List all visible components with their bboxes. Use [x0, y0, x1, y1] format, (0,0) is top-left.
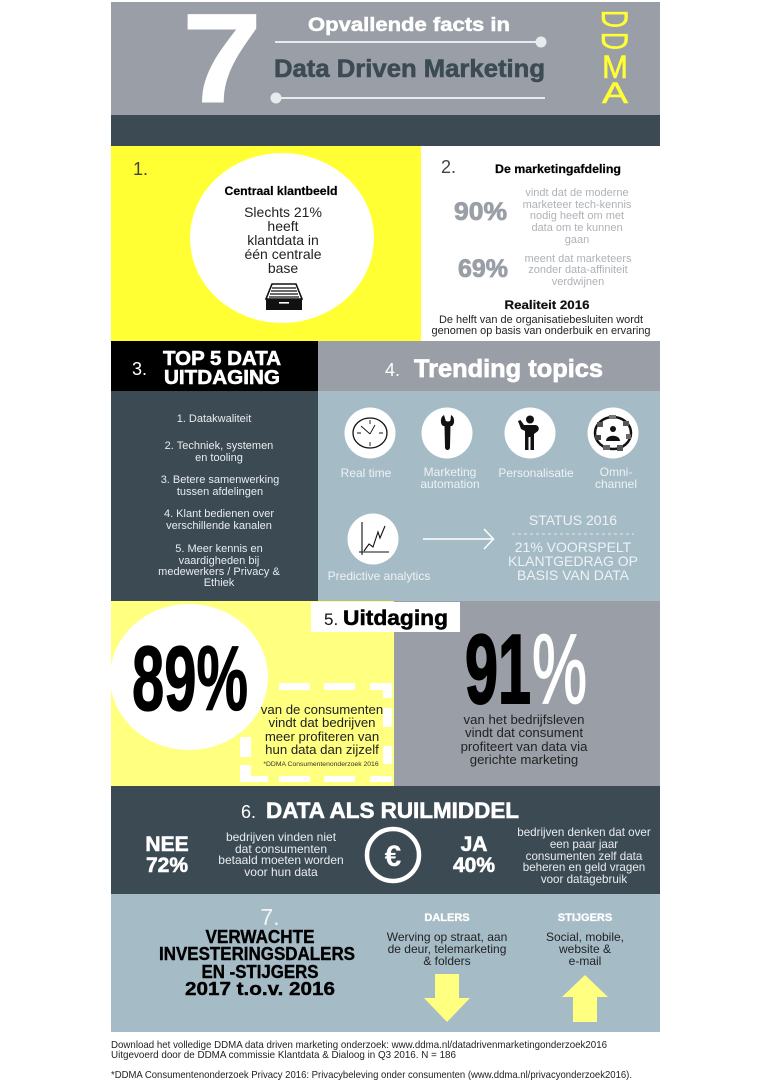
label: predictive analytics: Predictive analytics — [328, 569, 430, 583]
panel: 4 trending heading: 4. — [385, 360, 400, 380]
reality heading: Realiteit 2016 — [504, 298, 590, 312]
label: personalisatie: Personalisatie — [498, 466, 574, 480]
panel: 3 top 5 list: Ethiek — [204, 577, 235, 589]
heading: 5 Uitdaging: Uitdaging — [343, 607, 448, 630]
heading: Centraal klantbeeld — [224, 186, 338, 198]
number 1: 1. — [133, 159, 148, 179]
dalers text — [387, 930, 507, 968]
icon: archive drawer — [266, 284, 302, 310]
stat JA 40%: 40% — [453, 854, 495, 877]
text: van het bedrijfsleven — [464, 712, 584, 727]
panel: 3 top 5 heading: 3. — [132, 359, 147, 379]
panel: 5 consumers — [110, 601, 394, 786]
stat 90% text: vindt dat de moderne — [525, 187, 629, 199]
logo: DDMA: D — [594, 10, 635, 28]
footer notes: Uitgevoerd door de DDMA commissie Klantdata & Dialoog in Q3 2016. N = 186 — [111, 1050, 456, 1061]
text NEE: dat consumenten — [235, 842, 327, 856]
panel: 3 top 5 heading: TOP 5 DATA — [163, 348, 281, 370]
stat 91%: % — [532, 614, 587, 724]
panel: 3 top 5 list: 1. Datakwaliteit — [177, 413, 251, 425]
stat 90% text: nodig heeft om met — [530, 210, 624, 222]
text NEE: bedrijven vinden niet — [226, 830, 337, 844]
panel: 3 top 5 list: medewerkers / Privacy & — [158, 566, 280, 578]
title line 2: Data Driven Marketing — [274, 55, 545, 83]
icon: euro: € — [385, 840, 402, 873]
panel: 3 top 5 list: 3. Betere samenwerking — [161, 474, 279, 486]
stijgers text — [546, 930, 624, 968]
text NEE — [218, 830, 344, 879]
reality text: genomen op basis van onderbuik en ervaring — [432, 325, 650, 337]
logo: DDMA: A — [602, 77, 628, 110]
label: omni-channel — [595, 465, 637, 491]
stat 69% text: meent dat marketeers — [524, 253, 632, 265]
label: omni-channel: Omni- — [600, 465, 632, 479]
title rule bottom — [270, 92, 545, 104]
dashed frame — [240, 683, 392, 782]
heading: 2017 t.o.v. 2016 — [185, 979, 335, 999]
panel: 3 top 5 list: 2. Techniek, systemen — [165, 440, 273, 452]
icon: line chart — [348, 514, 398, 564]
reality text — [432, 314, 650, 337]
stat 90% text — [523, 187, 632, 246]
stat 91%: 91 — [465, 614, 531, 724]
text: vindt dat bedrijven — [268, 715, 376, 730]
stat JA 40% — [453, 833, 495, 877]
status text — [508, 534, 638, 583]
heading: DATA ALS RUILMIDDEL — [266, 798, 519, 823]
label: marketing automation: Marketing — [424, 465, 476, 479]
arrow — [423, 529, 494, 549]
logo: DDMA: M — [602, 49, 628, 85]
text JA: consumenten zelf data — [526, 850, 643, 863]
body text: Slechts 21% — [244, 204, 322, 220]
title line 1: Opvallende facts in — [308, 15, 510, 36]
icon: euro — [367, 829, 419, 881]
dalers text: & folders — [423, 954, 471, 968]
stijgers heading: STIJGERS — [558, 912, 612, 924]
source note: *DDMA Consumentenonderzoek 2016 — [263, 761, 379, 768]
panel: 7 investments — [111, 894, 660, 1032]
logo: DDMA: D — [594, 32, 635, 50]
panel: 4 trending heading — [318, 341, 660, 391]
label: omni-channel: channel — [595, 477, 637, 491]
text NEE: voor hun data — [244, 865, 318, 879]
heading: INVESTERINGSDALERS — [159, 944, 355, 964]
panel: 5 business — [394, 601, 660, 786]
text: meer profiteren van — [265, 729, 379, 744]
panel: 4 trending topics — [318, 391, 660, 601]
body text: base — [268, 260, 298, 276]
title rule top — [275, 36, 546, 48]
panel: 3 top 5 list: en tooling — [195, 452, 243, 464]
stat 90% text: gaan — [565, 234, 589, 246]
footer notes — [111, 1040, 632, 1081]
stat 69% text — [524, 253, 632, 288]
panel: 3 top 5 heading: UITDAGING — [164, 367, 280, 389]
heading: 6. — [241, 802, 256, 822]
body text: klantdata in — [247, 232, 319, 248]
panel: 3 top 5 list: tussen afdelingen — [177, 486, 263, 498]
text: vindt dat consument — [465, 725, 583, 740]
stat NEE 72%: 72% — [146, 854, 188, 877]
stat 69% text: verdwijnen — [552, 276, 604, 288]
arrow: up — [562, 975, 608, 1022]
panel: 3 top 5 list — [111, 391, 318, 601]
circle — [110, 604, 268, 750]
status text: BASIS VAN DATA — [517, 567, 630, 583]
text: van de consumenten — [261, 702, 383, 717]
text: profiteert van data via — [461, 739, 588, 754]
panel: 3 top 5 list: vaardigheden bij — [179, 555, 259, 567]
status heading: STATUS 2016 — [529, 512, 617, 528]
heading: VERWACHTE — [206, 927, 314, 947]
panel: 4 trending heading: Trending topics — [414, 355, 603, 383]
status text: KLANTGEDRAG OP — [508, 553, 638, 569]
stat 69%: 69% — [458, 255, 508, 283]
text JA: voor datagebruik — [541, 873, 627, 886]
footer notes: *DDMA Consumentenonderzoek Privacy 2016: Privacybeleving onder consumenten (www.ddma.nl/privacyonderzoek2016). — [111, 1070, 632, 1081]
panel: header — [111, 0, 660, 129]
panel: 3 top 5 heading — [111, 341, 318, 391]
heading — [159, 927, 355, 999]
body text: één centrale — [244, 246, 322, 262]
band: dark strip — [111, 115, 660, 146]
logo: DDMA — [594, 10, 635, 110]
stat 90% text: marketeer tech-kennis — [523, 199, 632, 211]
stat NEE 72%: NEE — [145, 833, 189, 856]
dalers text: de deur, telemarketing — [388, 942, 506, 956]
body text: heeft — [267, 218, 299, 234]
label: marketing automation — [420, 465, 480, 491]
reality text: De helft van de organisatiebesluiten wordt — [439, 314, 643, 326]
text: hun data dan zijzelf — [265, 742, 379, 757]
icon: omni-channel — [588, 408, 638, 458]
circle — [190, 153, 374, 323]
dalers text: Werving op straat, aan — [387, 930, 507, 944]
number 2: 2. — [441, 157, 456, 177]
stijgers text: e-mail — [569, 954, 601, 968]
stijgers text: website & — [558, 942, 611, 956]
text — [461, 712, 588, 767]
label: marketing automation: automation — [420, 477, 480, 491]
panel: 6 data as currency — [111, 786, 660, 894]
icon: wrench — [422, 408, 472, 458]
heading: De marketingafdeling — [495, 164, 621, 176]
arrow: down — [424, 974, 470, 1022]
dalers heading: DALERS — [424, 912, 470, 924]
heading: 5 Uitdaging — [311, 602, 460, 632]
heading: 5 Uitdaging: 5. — [324, 610, 338, 629]
text NEE: betaald moeten worden — [218, 853, 344, 867]
stat 89%: 89% — [132, 628, 248, 730]
text JA — [517, 826, 651, 886]
text JA: bedrijven denken dat over — [517, 826, 651, 839]
panel: 3 top 5 list: verschillende kanalen — [166, 520, 272, 532]
stijgers text: Social, mobile, — [546, 930, 624, 944]
status text: 21% VOORSPELT — [515, 539, 632, 555]
text JA: een paar jaar — [550, 838, 618, 851]
number 7: 7. — [260, 904, 280, 930]
text — [261, 702, 383, 757]
icon: clock — [344, 408, 396, 458]
panel: 3 top 5 list: 4. Klant bedienen over — [164, 508, 274, 520]
label: real time: Real time — [341, 466, 392, 480]
stat NEE 72% — [145, 833, 189, 877]
stat 90%: 90% — [454, 198, 507, 226]
body text — [244, 204, 322, 276]
text: gerichte marketing — [470, 752, 578, 767]
stat 90% text: data om te kunnen — [531, 222, 623, 234]
text JA: beheren en geld vragen — [523, 861, 645, 874]
heading: EN -STIJGERS — [202, 962, 318, 982]
panel: 3 top 5 list: 5. Meer kennis en — [175, 543, 263, 555]
panel: 1 central customer view — [111, 146, 421, 341]
panel: 2 marketing department — [421, 146, 660, 341]
icon: person — [504, 408, 556, 458]
stat JA 40%: JA — [461, 833, 487, 856]
stat 69% text: zonder data-affiniteit — [528, 264, 628, 276]
footer notes: Download het volledige DDMA data driven marketing onderzoek: www.ddma.nl/datadrivenmarketingonderzoek2016 — [111, 1040, 607, 1051]
